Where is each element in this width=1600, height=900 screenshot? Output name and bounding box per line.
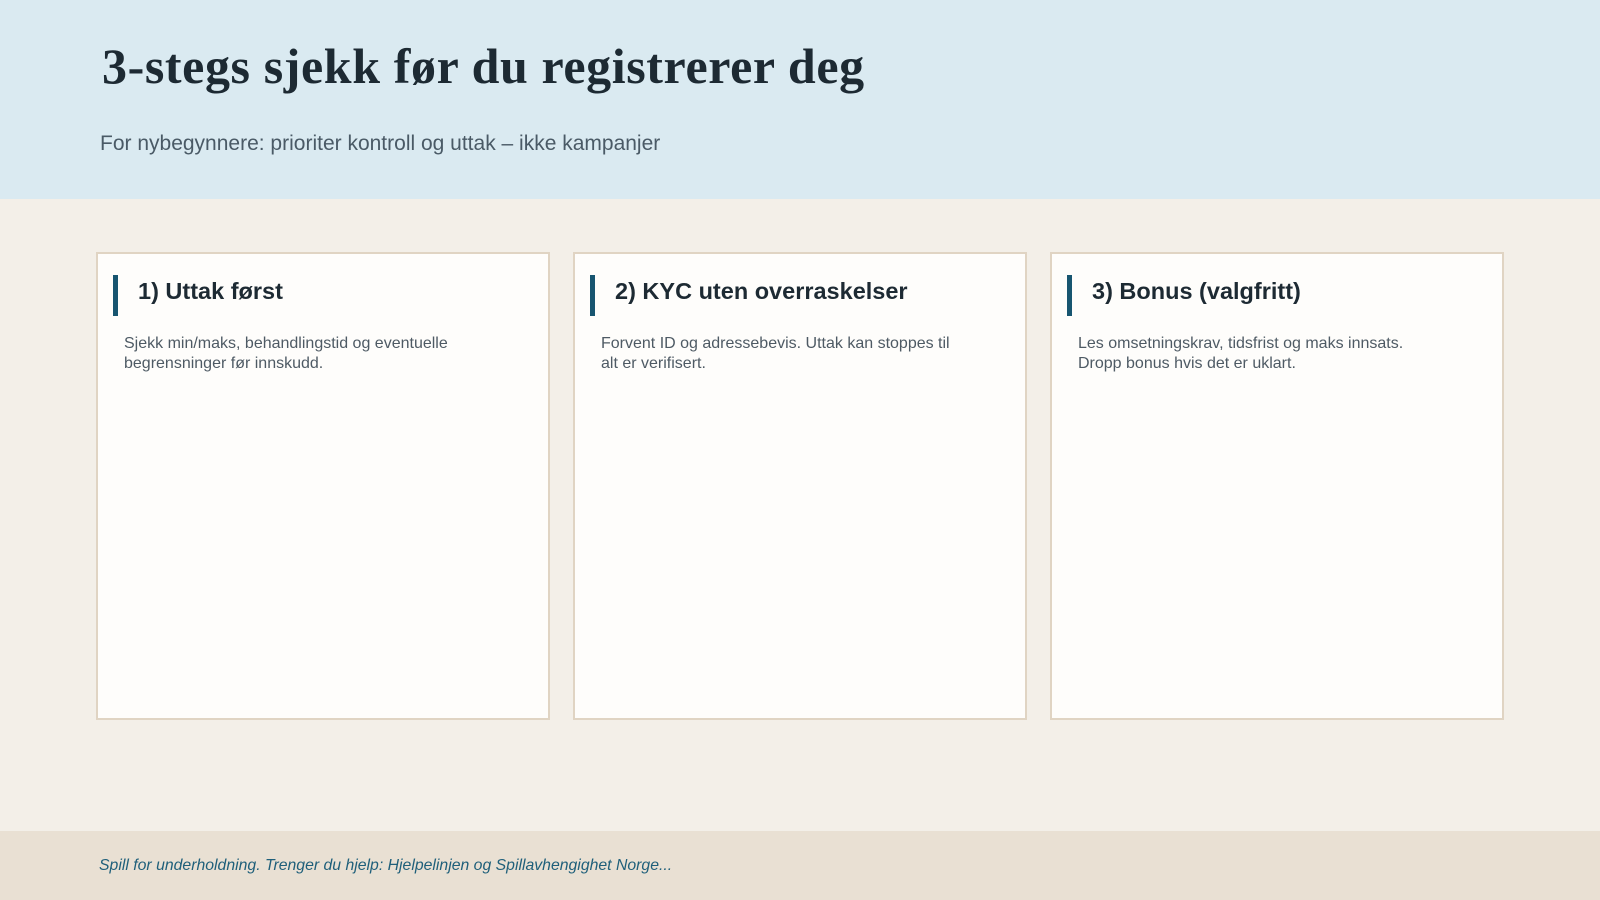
subtitle: For nybegynnere: prioriter kontroll og uttak – ikke kampanjer [100,132,660,155]
text: Les omsetningskrav, tidsfrist og maks innsats. Dropp bonus hvis det er uklart. [1078,335,1403,372]
accent bar [590,275,595,316]
title: 3-stegs sjekk før du registrerer deg [102,38,865,94]
heading: 2) KYC uten overraskelser [615,278,908,304]
panel: step 3 [1050,252,1504,720]
accent bar [1067,275,1072,316]
accent bar [113,275,118,316]
text: Sjekk min/maks, behandlingstid og eventuelle begrensninger før innskudd. [124,335,448,372]
heading: 3) Bonus (valgfritt) [1092,278,1301,304]
heading: 1) Uttak først [138,278,283,304]
panel: step 2 [573,252,1027,720]
footer [0,831,1600,900]
footer text: Spill for underholdning. Trenger du hjelp: Hjelpelinjen og Spillavhengighet Norge... [99,857,672,874]
text: Forvent ID og adressebevis. Uttak kan stoppes til alt er verifisert. [601,335,950,372]
header band [0,0,1600,199]
panel: step 1 [96,252,550,720]
